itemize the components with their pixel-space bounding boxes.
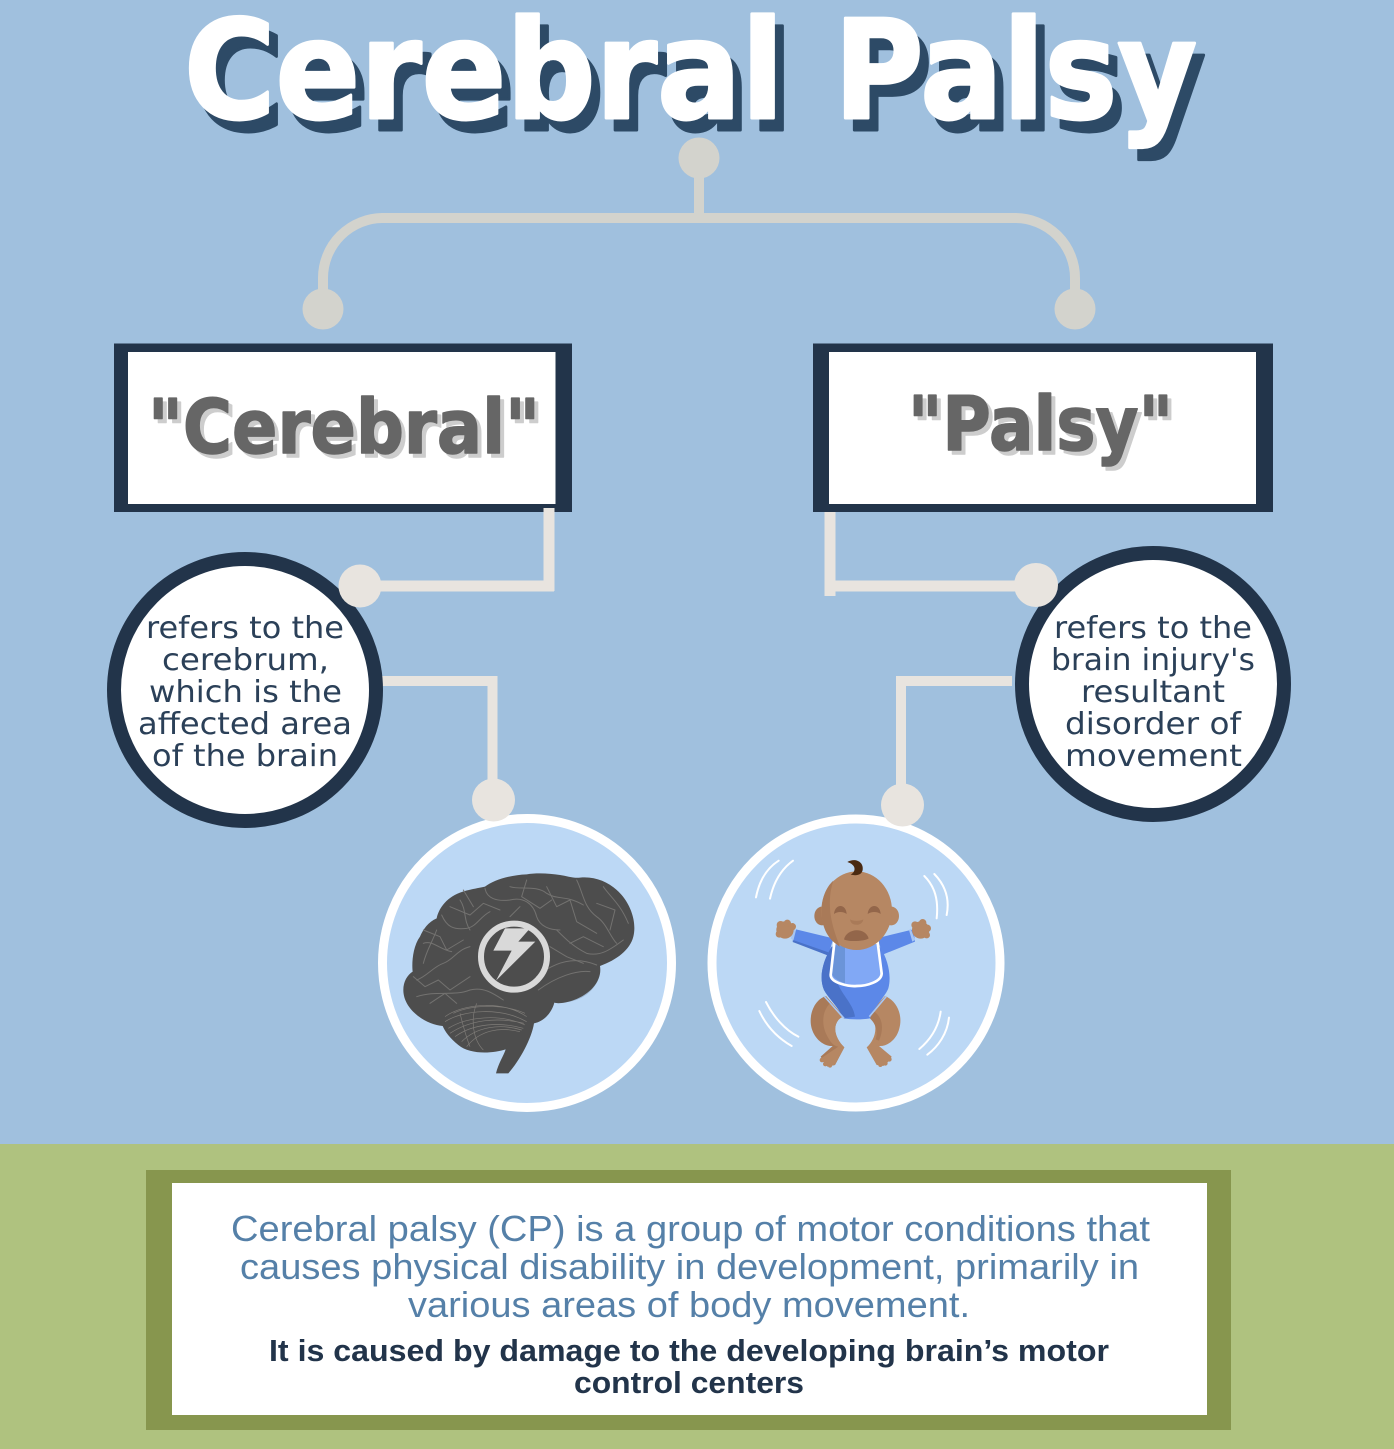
heading: Palsy: "Palsy" [908, 380, 1173, 468]
panel: brain bubble [382, 818, 672, 1108]
panel: Cerebral definition circle [114, 559, 376, 821]
text: palsy definition: brain injury's [1051, 643, 1255, 678]
hands [776, 919, 931, 939]
connector node: Palsy definition [1014, 563, 1058, 607]
title: Cerebral [193, 4, 793, 163]
panel: Palsy definition circle [1022, 553, 1284, 815]
text: palsy definition: disorder of [1065, 707, 1243, 742]
head [821, 871, 892, 950]
text: summary cause [269, 1333, 1109, 1400]
connector: Cerebral box to definition [360, 508, 554, 591]
text: palsy definition: movement [1065, 739, 1242, 774]
hair curl [847, 860, 863, 875]
arms [793, 929, 833, 956]
motion lines [756, 861, 949, 1055]
heading: Cerebral: "Cerebral" [148, 383, 540, 471]
icon: baby with motion lines [756, 860, 949, 1068]
legs [811, 996, 844, 1067]
connector node: Cerebral definition [338, 564, 382, 608]
text: cerebral definition: refers to the [146, 611, 344, 646]
top branching connector [302, 138, 1096, 330]
title: Palsy [843, 4, 1206, 163]
face [834, 906, 881, 914]
icon: brain with lightning bolt [403, 873, 634, 1073]
connector: Palsy definition to baby [901, 681, 1012, 805]
text: summary cause: control centers [574, 1365, 804, 1400]
bib [831, 943, 882, 986]
connector node: baby bubble [881, 784, 924, 826]
text: cerebral definition: of the brain [152, 739, 338, 774]
heading: Palsy: "Palsy" [912, 384, 1177, 472]
text: summary cause: It is caused by damage to the developing brain’s motor [269, 1333, 1109, 1368]
heading: Cerebral: "Cerebral" [152, 387, 544, 475]
text: summary description [231, 1208, 1150, 1325]
text: palsy definition: refers to the [1054, 611, 1252, 646]
panel: summary box [146, 1170, 1231, 1430]
connector node: brain bubble [472, 778, 515, 822]
panel: Cerebral heading box [114, 344, 572, 512]
text: summary description: causes physical disability in development, primarily in [240, 1246, 1139, 1287]
panel: Palsy heading box [813, 344, 1273, 512]
title [184, 0, 1206, 163]
text: summary description: Cerebral palsy (CP) is a group of motor conditions that [231, 1208, 1150, 1249]
panel: green footer band [0, 1144, 1394, 1449]
text: palsy definition [1051, 611, 1255, 774]
bodysuit [822, 947, 890, 1019]
text: cerebral definition: cerebrum, [162, 643, 329, 678]
connector: Palsy box to definition [825, 512, 1036, 596]
connector: Cerebral definition to brain [381, 681, 492, 800]
panel: baby bubble [712, 819, 1000, 1107]
text: cerebral definition: affected area [138, 707, 352, 742]
text: palsy definition: resultant [1081, 675, 1225, 710]
toes [820, 1057, 892, 1068]
ears [814, 907, 830, 925]
text: summary description: various areas of body movement. [408, 1284, 970, 1325]
text: cerebral definition: which is the [149, 675, 342, 710]
text: cerebral definition [138, 611, 352, 774]
